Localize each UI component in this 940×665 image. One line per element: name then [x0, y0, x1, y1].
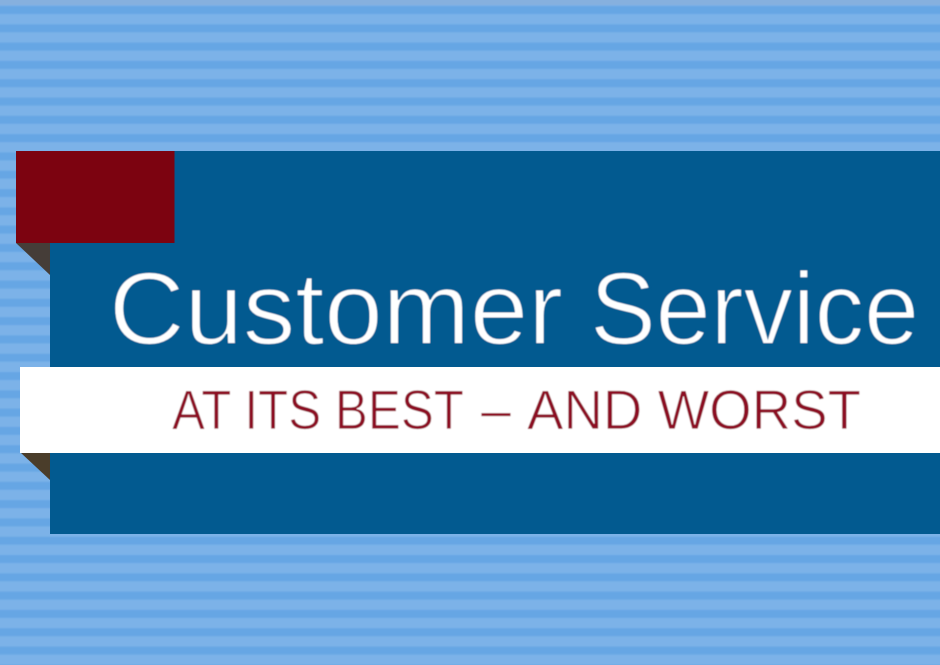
- ribbon fold: top: [16, 243, 50, 275]
- heading: Customer Service: Customer: [109, 251, 563, 366]
- white strip: [20, 367, 940, 453]
- subheading: at its best and worst: AT ITS BEST: [172, 378, 464, 441]
- subheading: at its best and worst: –: [481, 378, 512, 441]
- ribbon fold: bottom: [21, 453, 50, 480]
- subheading: at its best and worst: AND WORST: [527, 378, 861, 441]
- heading: Customer Service: Service: [590, 251, 919, 366]
- panel: blue banner: [50, 151, 940, 534]
- red corner tab: [16, 151, 174, 243]
